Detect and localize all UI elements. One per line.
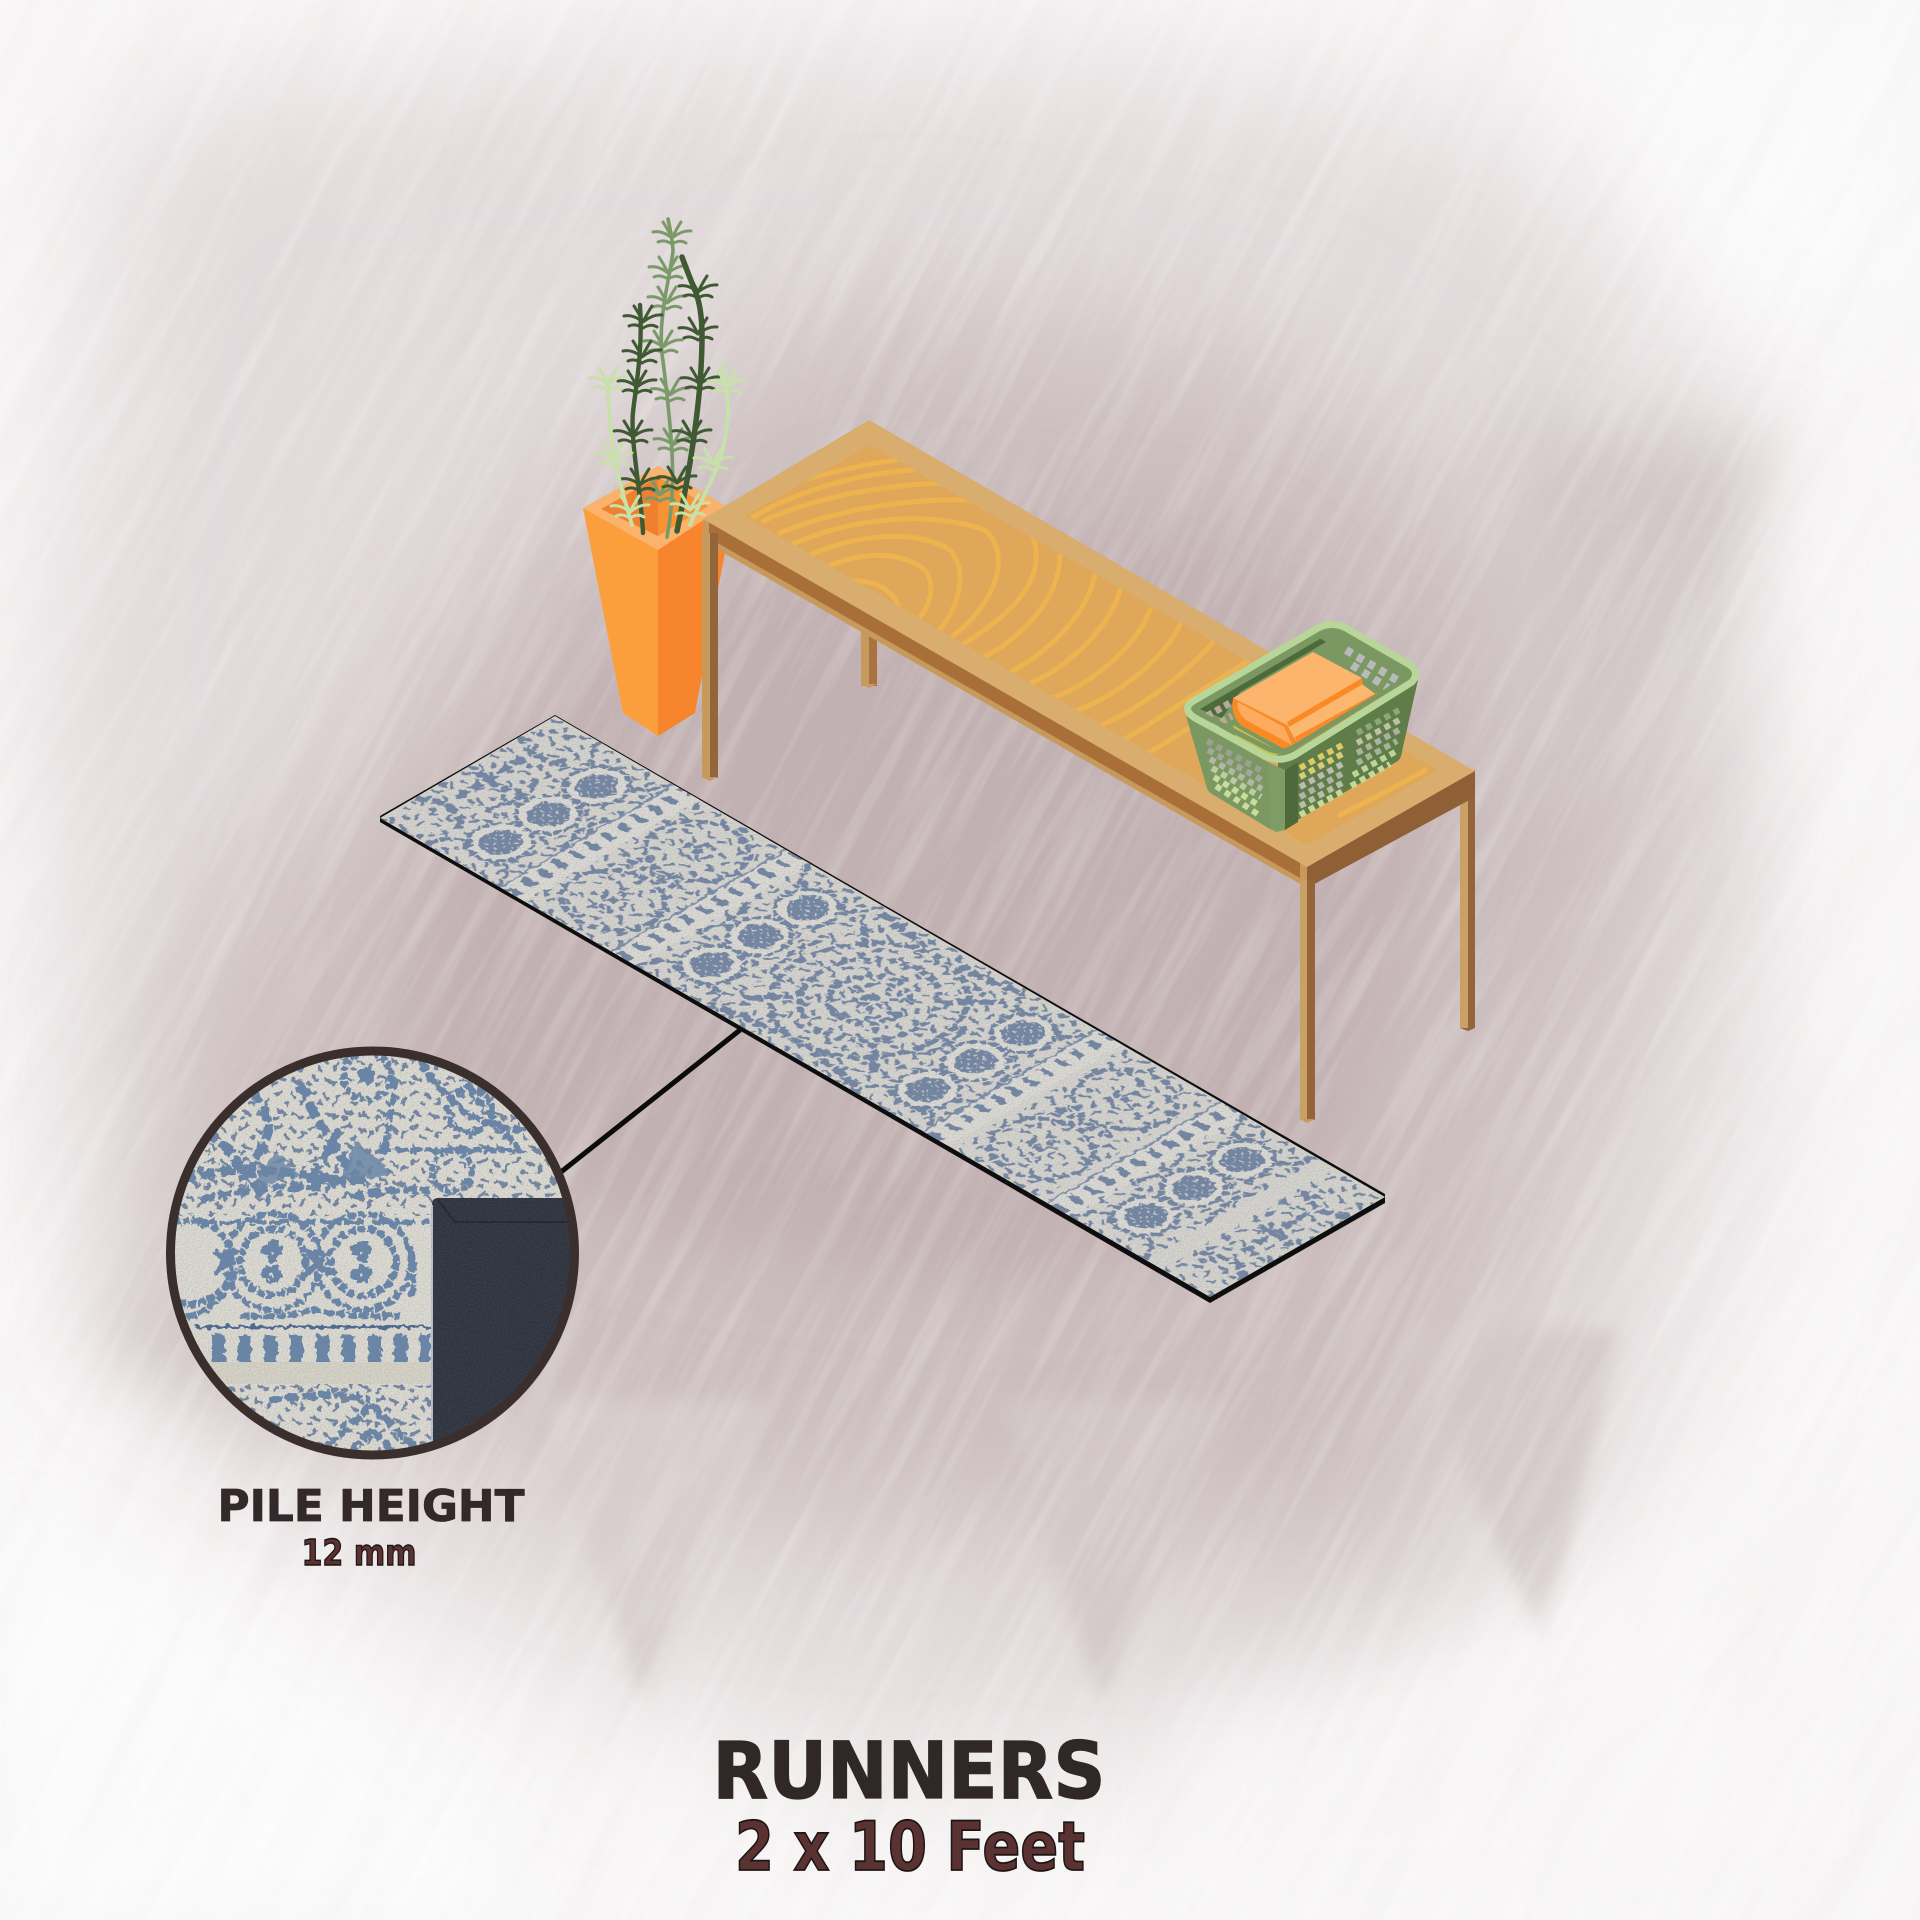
table back leg bbox=[861, 620, 877, 688]
subtitle: size: 2 x 10 Feet bbox=[735, 1808, 1085, 1887]
basket interior bbox=[1188, 624, 1416, 759]
wood grain lines bbox=[753, 460, 1425, 815]
connector line from runner to detail circle bbox=[561, 1030, 740, 1172]
table top and apron bbox=[703, 420, 1475, 888]
title: runners: RUNNERS bbox=[712, 1727, 1106, 1817]
circle border bbox=[170, 1051, 574, 1455]
rug pattern bbox=[370, 700, 1400, 1310]
tick border row bbox=[195, 1327, 430, 1350]
plant stems and leaves bbox=[589, 219, 746, 537]
table right leg bbox=[1460, 780, 1475, 1031]
table bbox=[702, 420, 1475, 1123]
orange planter bbox=[583, 466, 725, 736]
rug thickness bbox=[380, 715, 1385, 1303]
label: pile height: PILE HEIGHT bbox=[218, 1481, 524, 1532]
basket right face holes bbox=[1300, 708, 1403, 815]
table front leg bbox=[1300, 880, 1315, 1123]
basket with folded towels bbox=[1186, 624, 1418, 832]
lower arches bbox=[165, 1385, 435, 1465]
label: 12 mm: 12 mm bbox=[302, 1533, 416, 1574]
detail circle: pile height close-up bbox=[148, 1045, 580, 1465]
medallion row bbox=[148, 1214, 430, 1320]
table front-left leg bbox=[702, 533, 718, 781]
basket body bbox=[1186, 680, 1418, 832]
runner rug bbox=[370, 700, 1400, 1310]
rug backing (dark corner) bbox=[432, 1198, 578, 1460]
rug close-up bbox=[148, 1045, 580, 1465]
folded towels bbox=[1232, 652, 1380, 757]
basket left face holes bbox=[1207, 741, 1262, 815]
plant pot and plant bbox=[583, 219, 746, 736]
basket rim bbox=[1188, 624, 1416, 759]
upper ornate area bbox=[165, 1045, 580, 1215]
